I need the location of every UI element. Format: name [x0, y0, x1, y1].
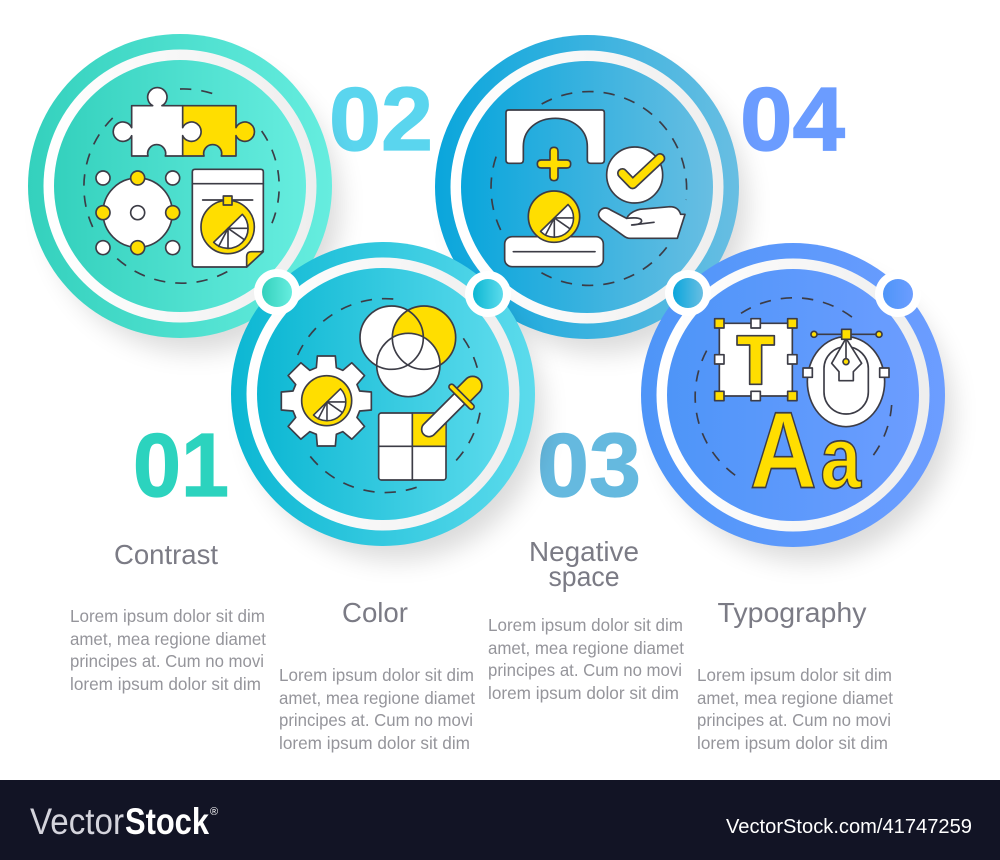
icon: gear, venn and colour picker — [281, 299, 491, 493]
text block: contrast: amet, mea regione diamet — [70, 629, 266, 649]
text block: contrast: Lorem ipsum dolor sit dim — [70, 606, 265, 626]
text block: typography — [697, 665, 893, 753]
heading: negative space: Negative — [529, 536, 639, 567]
heading: color: Color — [342, 597, 408, 628]
logo: VectorStock — [30, 801, 218, 842]
connector node 2 — [465, 271, 511, 317]
logo: VectorStock: Stock — [125, 801, 209, 842]
connector node 1 — [254, 269, 300, 315]
number 04: 04 — [740, 70, 845, 170]
footer bar — [0, 780, 1000, 860]
text block: color: amet, mea regione diamet — [279, 688, 475, 708]
heading: negative space — [529, 536, 639, 592]
text block: color: Lorem ipsum dolor sit dim — [279, 665, 474, 685]
number 03: 03 — [537, 416, 641, 516]
connector node 4 — [875, 271, 921, 317]
connector node 3 — [665, 270, 711, 316]
icon: text box, pen tool and Aa: A — [750, 389, 817, 510]
text block: negative space: lorem ipsum dolor sit dim — [488, 683, 679, 703]
heading: negative space: space — [548, 561, 620, 592]
text block: color: lorem ipsum dolor sit dim — [279, 733, 470, 753]
text block: contrast: lorem ipsum dolor sit dim — [70, 674, 261, 694]
text block: typography: amet, mea regione diamet — [697, 688, 893, 708]
logo: VectorStock: ® — [210, 806, 218, 818]
text block: typography: Lorem ipsum dolor sit dim — [697, 665, 892, 685]
circle 3: negative space — [435, 35, 747, 353]
number 02: 02 — [329, 70, 433, 170]
heading: contrast: Contrast — [114, 539, 218, 570]
text block: negative space: amet, mea regione diamet — [488, 638, 684, 658]
text block: color: principes at. Cum no movi — [279, 710, 473, 730]
circle 2: color — [231, 242, 543, 560]
text block: contrast — [70, 606, 266, 694]
logo: VectorStock: Vector — [30, 801, 124, 842]
icon: puzzle, target and document — [84, 88, 279, 283]
text block: typography: principes at. Cum no movi — [697, 710, 891, 730]
heading: typography: Typography — [718, 597, 866, 628]
icon: text box, pen tool and Aa — [695, 298, 892, 510]
circle 1: contrast — [28, 34, 340, 352]
text block: color — [279, 665, 475, 753]
text block: negative space: Lorem ipsum dolor sit dim — [488, 615, 683, 635]
text block: negative space — [488, 615, 684, 703]
circle 4: typography — [641, 243, 953, 561]
text block: typography: lorem ipsum dolor sit dim — [697, 733, 888, 753]
text block: contrast: principes at. Cum no movi — [70, 651, 264, 671]
icon: text box, pen tool and Aa: a — [820, 409, 862, 507]
number 01: 01 — [133, 416, 229, 516]
icon: arch, lemon, check and hand — [491, 92, 687, 285]
text block: negative space: principes at. Cum no movi — [488, 660, 682, 680]
image id: VectorStock.com/41747259 — [726, 816, 972, 838]
